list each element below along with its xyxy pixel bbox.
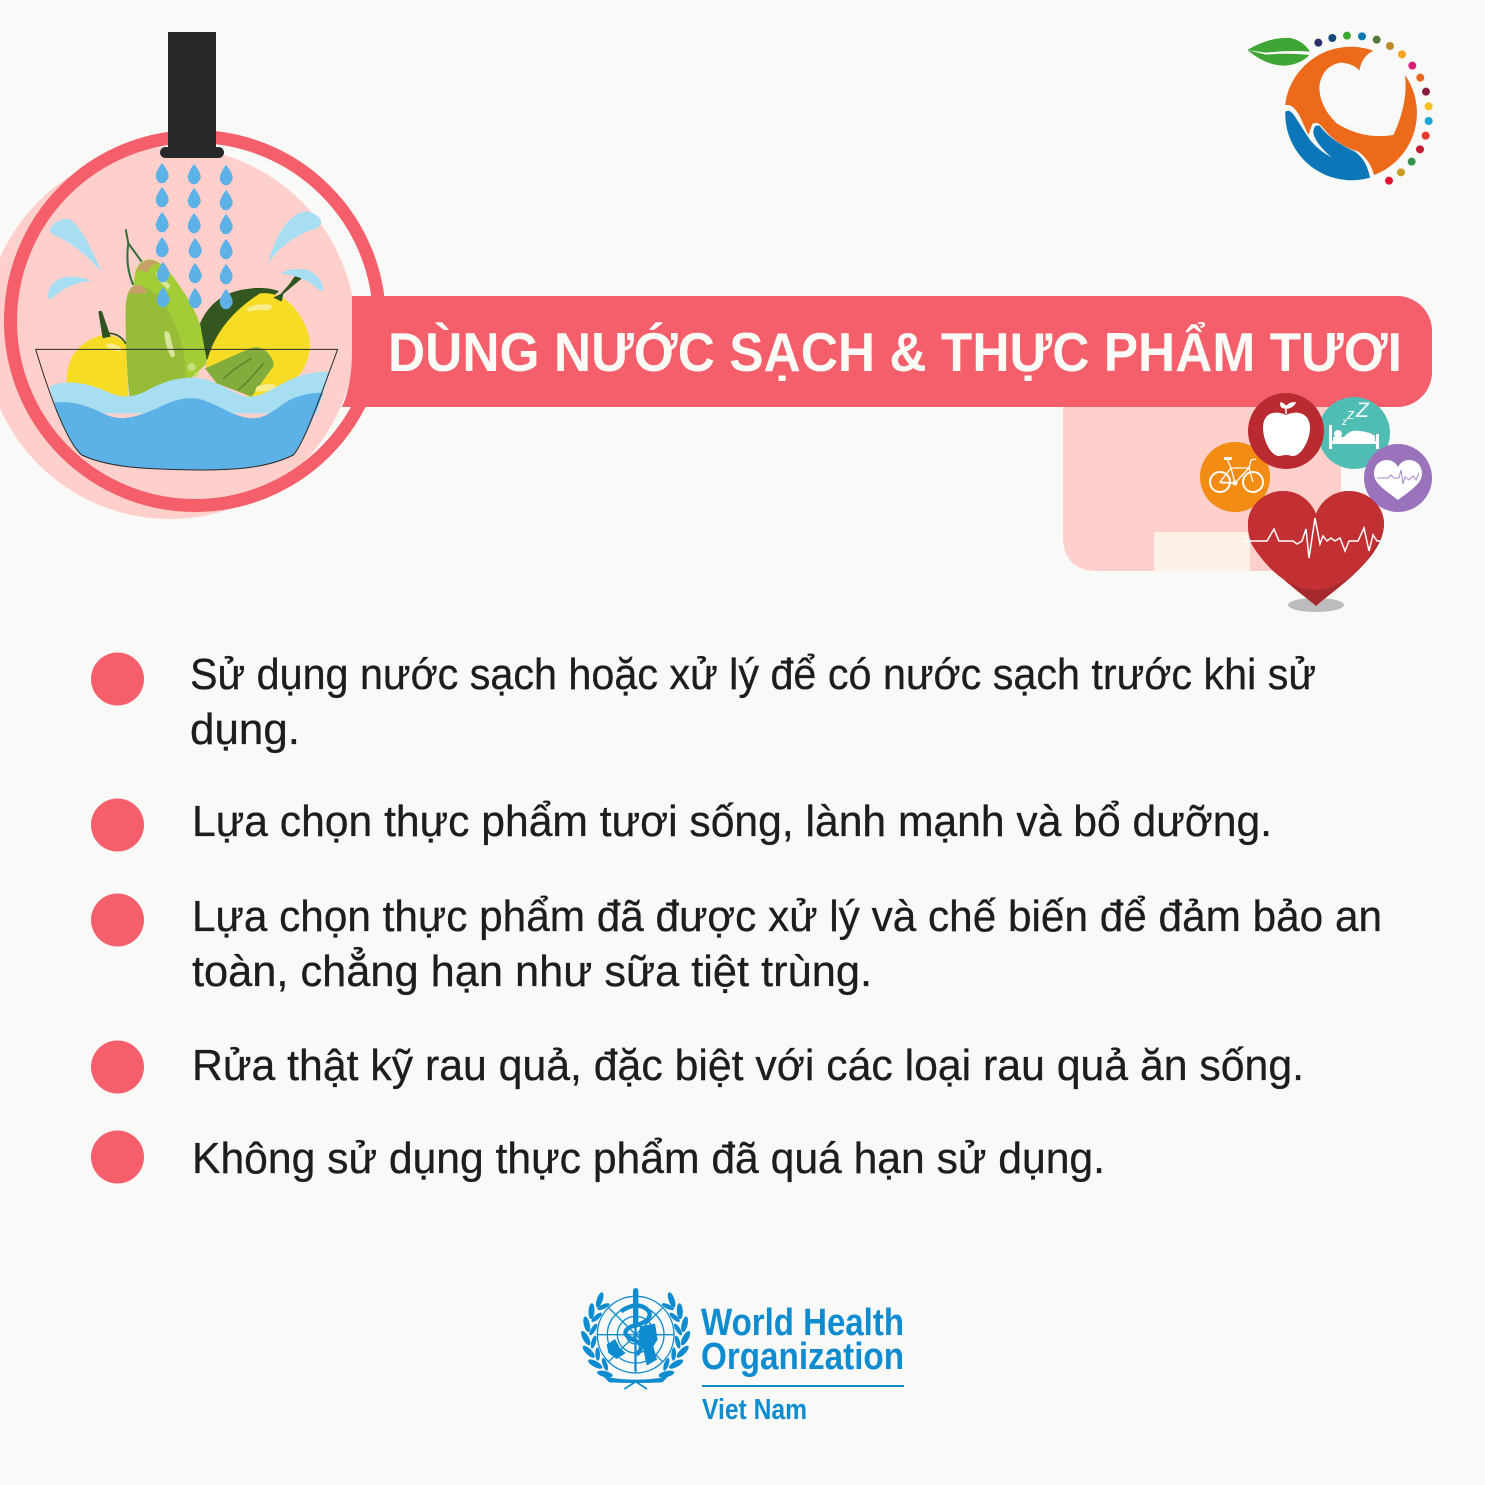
water bowl: [36, 349, 338, 470]
title banner: DÙNG NƯỚC SẠCH & THỰC PHẨM TƯƠI: [388, 321, 1402, 383]
fruit group: [67, 229, 310, 403]
bullet 4: Rửa thật kỹ rau quả, đặc biệt với các loại rau quả ăn sống.: [192, 1041, 1304, 1090]
pink backdrop circle: [0, 147, 356, 519]
bullet 5: Không sử dụng thực phẩm đã quá hạn sử dụng.: [192, 1134, 1105, 1183]
logo blue hand: [1285, 111, 1370, 180]
title banner: [342, 296, 1432, 407]
bullet 2: Lựa chọn thực phẩm tươi sống, lành mạnh và bổ dưỡng.: [192, 797, 1272, 846]
falling water drops: [156, 163, 233, 309]
icon: sleeping in bed: Z: [1355, 399, 1370, 422]
bullet 1: [91, 650, 1316, 754]
icon: sleeping in bed: [1318, 397, 1390, 469]
health icons cluster: [1200, 393, 1432, 612]
icon: sleeping in bed: z: [1346, 406, 1355, 423]
logo rainbow dots: [1314, 32, 1433, 185]
bullet 3: toàn, chẳng hạn như sữa tiệt trùng.: [192, 945, 872, 996]
water splashes: [48, 212, 323, 299]
bullet list: [91, 650, 1382, 1184]
coral ring: [10, 136, 380, 506]
WHO logo: [579, 1288, 904, 1426]
icon: bicycle: [1200, 442, 1270, 512]
WHO wordmark: [701, 1302, 904, 1426]
bullet 1: Sử dụng nước sạch hoặc xử lý để có nước sạch trước khi sử: [190, 650, 1316, 699]
WHO wordmark: World Health: [701, 1302, 904, 1344]
logo: orange heart and hand: [1247, 32, 1433, 185]
icon: sleeping in bed: z: [1341, 417, 1347, 428]
WHO wordmark: Viet Nam: [702, 1394, 807, 1426]
icon: apple: [1248, 393, 1324, 469]
tap: [160, 32, 224, 158]
bullet 3: Lựa chọn thực phẩm đã được xử lý và chế biến để đảm bảo an: [192, 892, 1382, 941]
bullet 3: [91, 892, 1382, 996]
pink panel behind health icons: [1063, 400, 1341, 571]
icon: large heart: [1244, 491, 1384, 612]
WHO wordmark: Organization: [701, 1336, 904, 1378]
logo leaf: [1247, 38, 1310, 66]
icon: heart monitor: [1364, 444, 1432, 512]
WHO emblem: [579, 1288, 692, 1389]
logo orange fruit: [1285, 47, 1417, 175]
bullet 1: dụng.: [190, 705, 300, 754]
illustration: fruit washed under tap: [0, 32, 380, 519]
